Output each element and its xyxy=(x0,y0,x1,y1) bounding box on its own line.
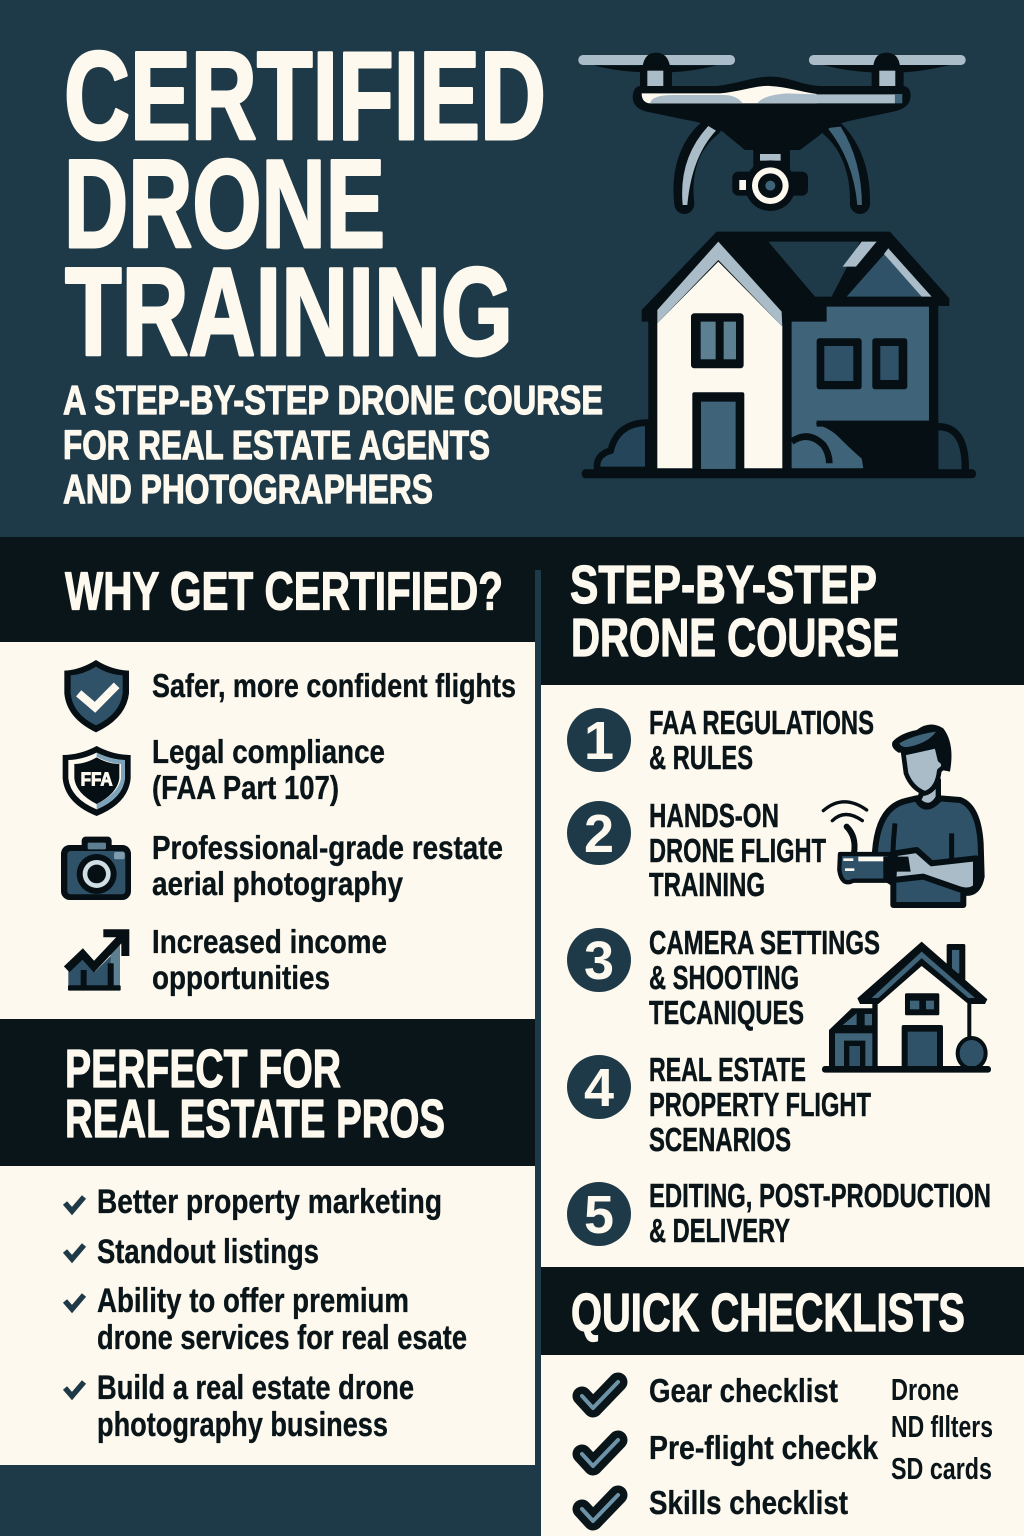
step 4: SCENARIOS xyxy=(649,1121,791,1158)
step 4: 4 xyxy=(584,1058,614,1118)
panel: perfect for real estate pros xyxy=(0,1019,535,1465)
step 5: 5 xyxy=(584,1185,614,1245)
list: gear items xyxy=(891,1372,993,1486)
icons: check marks xyxy=(582,1382,618,1521)
title: CERTIFIED xyxy=(64,27,546,166)
subtitle xyxy=(63,377,603,512)
icon: FAA shield: FFA xyxy=(81,768,113,789)
list: real estate benefits: drone services for real esate xyxy=(97,1319,467,1357)
icon: house xyxy=(582,232,976,478)
step 3: 3 xyxy=(584,931,614,991)
icon: small house xyxy=(822,942,991,1073)
text: legal compliance: (FAA Part 107) xyxy=(152,769,339,806)
text: legal compliance xyxy=(152,733,385,806)
list: gear items: Drone xyxy=(891,1372,959,1407)
step 2: 2 xyxy=(584,804,614,864)
panel: why get certified xyxy=(0,537,541,1536)
step 2: HANDS-ON xyxy=(649,797,779,834)
step 3 xyxy=(567,924,880,1031)
list: real estate benefits: Better property marketing xyxy=(97,1183,442,1221)
header panel xyxy=(0,0,1024,537)
step 5 xyxy=(567,1177,991,1249)
checks: small xyxy=(65,1197,84,1396)
list: checklists: Pre-flight checkk xyxy=(649,1429,879,1466)
heading: step-by-step drone course: STEP-BY-STEP xyxy=(570,555,877,615)
heading: perfect for real estate pros: REAL ESTATE PROS xyxy=(65,1089,445,1149)
title: DRONE xyxy=(64,135,385,274)
heading: why get certified: WHY GET CERTIFIED? xyxy=(65,562,503,622)
text: income: Increased income xyxy=(152,923,387,960)
subtitle: FOR REAL ESTATE AGENTS xyxy=(63,422,490,468)
step 2: DRONE FLIGHT xyxy=(649,832,826,869)
text: income xyxy=(152,923,387,996)
list: real estate benefits: Build a real estate drone xyxy=(97,1369,414,1407)
text: aerial photography xyxy=(152,829,503,902)
step 1: & RULES xyxy=(649,739,753,776)
subtitle: A STEP-BY-STEP DRONE COURSE xyxy=(63,377,603,423)
icon: FAA shield xyxy=(63,746,131,816)
step 2: TRAINING xyxy=(649,866,765,903)
text: aerial photography: Professional-grade restate xyxy=(152,829,503,866)
step 4: REAL ESTATE xyxy=(649,1051,806,1088)
text: income: opportunities xyxy=(152,959,330,996)
text: aerial photography: aerial photography xyxy=(152,865,404,902)
step 3: TECANIQUES xyxy=(649,994,804,1031)
list: real estate benefits: Ability to offer premium xyxy=(97,1282,409,1320)
step 3: CAMERA SETTINGS xyxy=(649,924,880,961)
icon: camera xyxy=(61,837,131,900)
panel: quick checklists xyxy=(541,1267,1024,1536)
heading: perfect for real estate pros: PERFECT FOR xyxy=(65,1039,341,1099)
subtitle: AND PHOTOGRAPHERS xyxy=(63,466,433,512)
heading: step-by-step drone course: DRONE COURSE xyxy=(571,608,899,668)
heading: perfect for real estate pros xyxy=(65,1039,445,1149)
icon: rising chart xyxy=(67,933,125,991)
list: real estate benefits: photography business xyxy=(97,1406,388,1444)
step 1: 1 xyxy=(584,711,614,771)
list: checklists: Gear checklist xyxy=(649,1372,838,1409)
list: checklists xyxy=(649,1372,879,1521)
step 5: & DELIVERY xyxy=(649,1212,790,1249)
step 4: PROPERTY FLIGHT xyxy=(649,1086,871,1123)
step 2 xyxy=(567,797,826,903)
list: gear items: SD cards xyxy=(891,1451,992,1486)
list: real estate benefits xyxy=(97,1183,467,1444)
list: checklists: Skills checklist xyxy=(649,1484,848,1521)
title xyxy=(64,27,546,382)
text: legal compliance: Legal compliance xyxy=(152,733,385,770)
panel: step-by-step course xyxy=(541,537,1024,1267)
step 1 xyxy=(567,704,874,776)
heading: step-by-step drone course xyxy=(570,555,899,668)
step 1: FAA REGULATIONS xyxy=(649,704,874,741)
title: TRAINING xyxy=(65,243,513,382)
step 4 xyxy=(567,1051,871,1158)
list: real estate benefits: Standout listings xyxy=(97,1233,319,1271)
step 3: & SHOOTING xyxy=(649,959,799,996)
icon: drone xyxy=(578,53,966,211)
icon: shield check xyxy=(64,660,129,732)
text: safer flights: Safer, more confident flights xyxy=(152,667,516,704)
icon: pilot with controller xyxy=(823,725,982,905)
